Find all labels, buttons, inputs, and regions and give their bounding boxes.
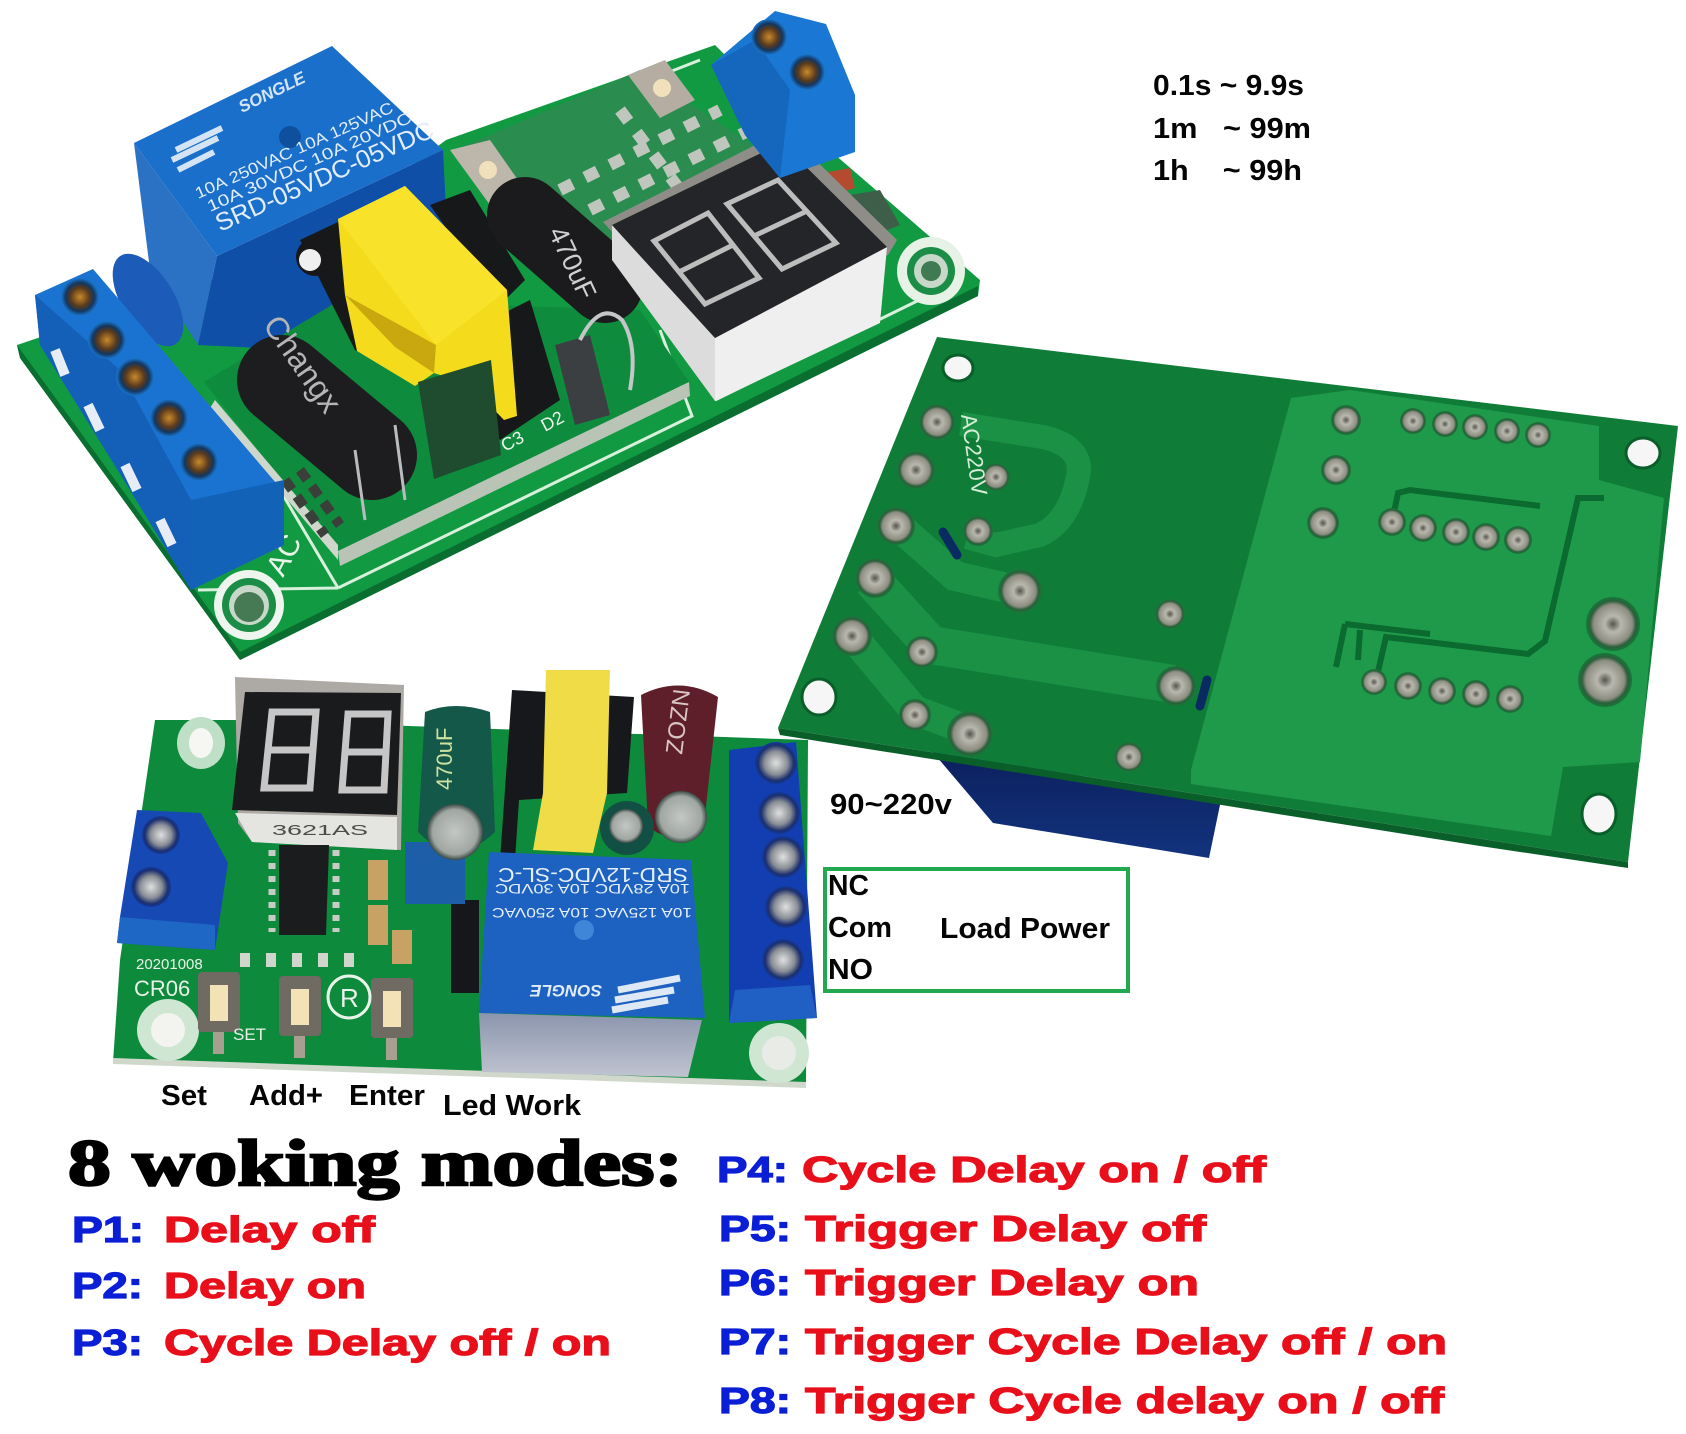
mounting holes	[802, 355, 1660, 834]
mode P3: P3:	[72, 1322, 143, 1363]
circuit board	[17, 45, 980, 660]
silkscreen text AC: AC	[260, 529, 309, 581]
relay rating text: 10A 250VAC 10A 125VAC	[193, 100, 396, 203]
relay	[134, 46, 447, 350]
seven-segment display	[603, 130, 897, 401]
button label: Enter: Enter	[349, 1080, 425, 1112]
display digit right	[727, 180, 836, 269]
label: input voltage: 90~220v	[830, 789, 952, 821]
label: Led Work: Led Work	[443, 1090, 582, 1122]
small capacitor	[296, 238, 334, 276]
mode P3: Cycle Delay off / on	[164, 1322, 611, 1363]
mounting hole left top	[177, 717, 225, 769]
sub-board label D2: D2	[537, 407, 567, 436]
mode P7: Trigger Cycle Delay off / on	[805, 1321, 1447, 1362]
mode P5: P5:	[719, 1208, 791, 1249]
mode P6	[719, 1262, 1199, 1303]
display digit right	[342, 714, 388, 790]
relay logo stripes	[172, 128, 222, 170]
time ranges text	[1153, 70, 1311, 187]
button Add	[279, 976, 321, 1058]
mode P8	[719, 1380, 1445, 1421]
tact button top	[628, 60, 695, 118]
mode P7: P7:	[719, 1321, 791, 1362]
smd resistors right	[850, 190, 900, 235]
black header strip	[451, 900, 479, 993]
capacitor value: 470uF	[543, 222, 602, 304]
callout: load power terminals: Com	[828, 912, 892, 944]
left terminal block	[35, 269, 284, 590]
time ranges text: 0.1s ~ 9.9s	[1153, 70, 1304, 102]
relay rating: 10A 28VDC 10A 30VDC	[495, 881, 690, 897]
solder pads	[832, 404, 1640, 772]
brown capacitor	[641, 685, 718, 843]
relay model: SRD-12VDC-SL-C	[498, 863, 688, 885]
mounting hole bottom right	[749, 1023, 809, 1083]
slots	[943, 532, 1207, 706]
mounting hole bottom left	[214, 570, 284, 640]
terminal screws	[61, 278, 218, 481]
board back	[778, 337, 1678, 862]
mode P5: Trigger Delay off	[805, 1208, 1207, 1249]
large electrolytic capacitor	[282, 380, 372, 455]
callout: load power terminals: NC	[828, 870, 869, 902]
mode P4: Cycle Delay on / off	[802, 1149, 1267, 1190]
top terminal block	[711, 11, 855, 178]
mode P5	[719, 1208, 1207, 1249]
callout: load power terminals: NO	[828, 954, 873, 986]
heading: working modes: 8 woking modes:	[68, 1127, 683, 1200]
smd components	[368, 860, 412, 964]
smd resistors on sub-board	[285, 470, 340, 535]
mode P2: Delay on	[164, 1265, 366, 1306]
terminal slots	[55, 350, 172, 545]
mounting hole right	[897, 237, 965, 305]
panel: front view of module	[113, 670, 817, 1088]
relay model text: SRD-05VDC-05VDC	[211, 116, 438, 237]
blue smd sub-board	[405, 842, 465, 904]
load trace 3	[849, 632, 973, 732]
mode P2	[72, 1265, 366, 1306]
sub-board labels: C3	[497, 427, 527, 456]
silkscreen date: 20201008	[136, 956, 203, 973]
relay logo	[612, 978, 680, 1010]
yellow transformer core	[338, 186, 517, 420]
status LED	[828, 168, 855, 194]
right terminal block	[729, 742, 817, 1023]
panel: top product photo of relay module	[17, 11, 980, 660]
transformer bobbin	[500, 690, 634, 860]
relay brand: SONGLE	[235, 68, 309, 117]
copper traces	[1336, 490, 1604, 676]
mode P7	[719, 1321, 1447, 1362]
power supply sub-board	[204, 300, 689, 551]
capacitor value: 470uF	[432, 728, 457, 790]
mode P1: Delay off	[164, 1209, 376, 1250]
display digit left	[264, 712, 316, 788]
mode P1: P1:	[72, 1209, 144, 1250]
tact button left	[450, 140, 525, 205]
display digit left	[654, 213, 759, 304]
button Enter	[371, 978, 413, 1060]
varistor	[98, 242, 198, 358]
relay rating text 2: 10A 30VDC 10A 20VDC	[205, 110, 414, 216]
button label: Add+: Add+	[249, 1080, 323, 1112]
mode P3	[72, 1322, 611, 1363]
AC trace	[961, 424, 1079, 545]
callout: load power terminals: Load Power	[940, 913, 1110, 945]
relay brand: SONGLE	[530, 981, 602, 1000]
small capacitor	[600, 801, 654, 855]
mode P2: P2:	[72, 1265, 143, 1306]
load trace 1	[896, 524, 1020, 591]
logo R	[328, 976, 370, 1018]
panel: back side of circuit board	[778, 337, 1678, 868]
time ranges text: 1h ~ 99h	[1153, 155, 1302, 187]
mode P1	[72, 1209, 376, 1250]
left terminal block	[117, 810, 228, 950]
capacitor 470uF	[525, 215, 605, 285]
relay hole	[574, 920, 594, 940]
relay hole mark	[279, 126, 301, 148]
silkscreen model: CR06	[134, 976, 190, 1001]
board front	[113, 720, 808, 1086]
display part number: 3621AS	[272, 822, 368, 839]
silkscreen SET: SET	[233, 1025, 266, 1044]
mode P8: Trigger Cycle delay on / off	[805, 1380, 1445, 1421]
button Set	[198, 972, 240, 1054]
capacitor brand: Changx	[256, 308, 349, 419]
capacitor brand: ZOZN	[661, 688, 696, 756]
mode P8: P8:	[719, 1380, 791, 1421]
load trace 2	[872, 580, 1173, 684]
IC chip	[279, 845, 329, 935]
display module	[232, 677, 404, 850]
mode P6: P6:	[719, 1262, 791, 1303]
callout: load power terminals	[825, 869, 1128, 991]
button label: Set: Set	[161, 1080, 207, 1112]
relay rating 2: 10A 125VAC 10A 250VAC	[492, 905, 692, 921]
mounting hole bottom left	[137, 999, 199, 1061]
copper pour region	[1191, 390, 1664, 836]
relay	[479, 852, 705, 1077]
transformer bobbin	[300, 190, 560, 440]
smd component area	[455, 70, 800, 250]
film capacitor	[418, 360, 501, 479]
logo R: R	[340, 983, 359, 1013]
yellow transformer	[533, 670, 610, 853]
IC pins	[272, 850, 336, 932]
diode with leads	[355, 313, 633, 520]
mode P4: P4:	[717, 1149, 788, 1190]
time ranges text: 1m ~ 99m	[1153, 113, 1311, 145]
green capacitor	[418, 706, 495, 860]
header row	[240, 953, 370, 967]
relay body under board	[931, 750, 1221, 858]
mode P6: Trigger Delay on	[805, 1262, 1199, 1303]
mode P4	[717, 1149, 1267, 1190]
silkscreen outline	[198, 60, 960, 590]
silkscreen AC220V: AC220V	[956, 412, 992, 497]
